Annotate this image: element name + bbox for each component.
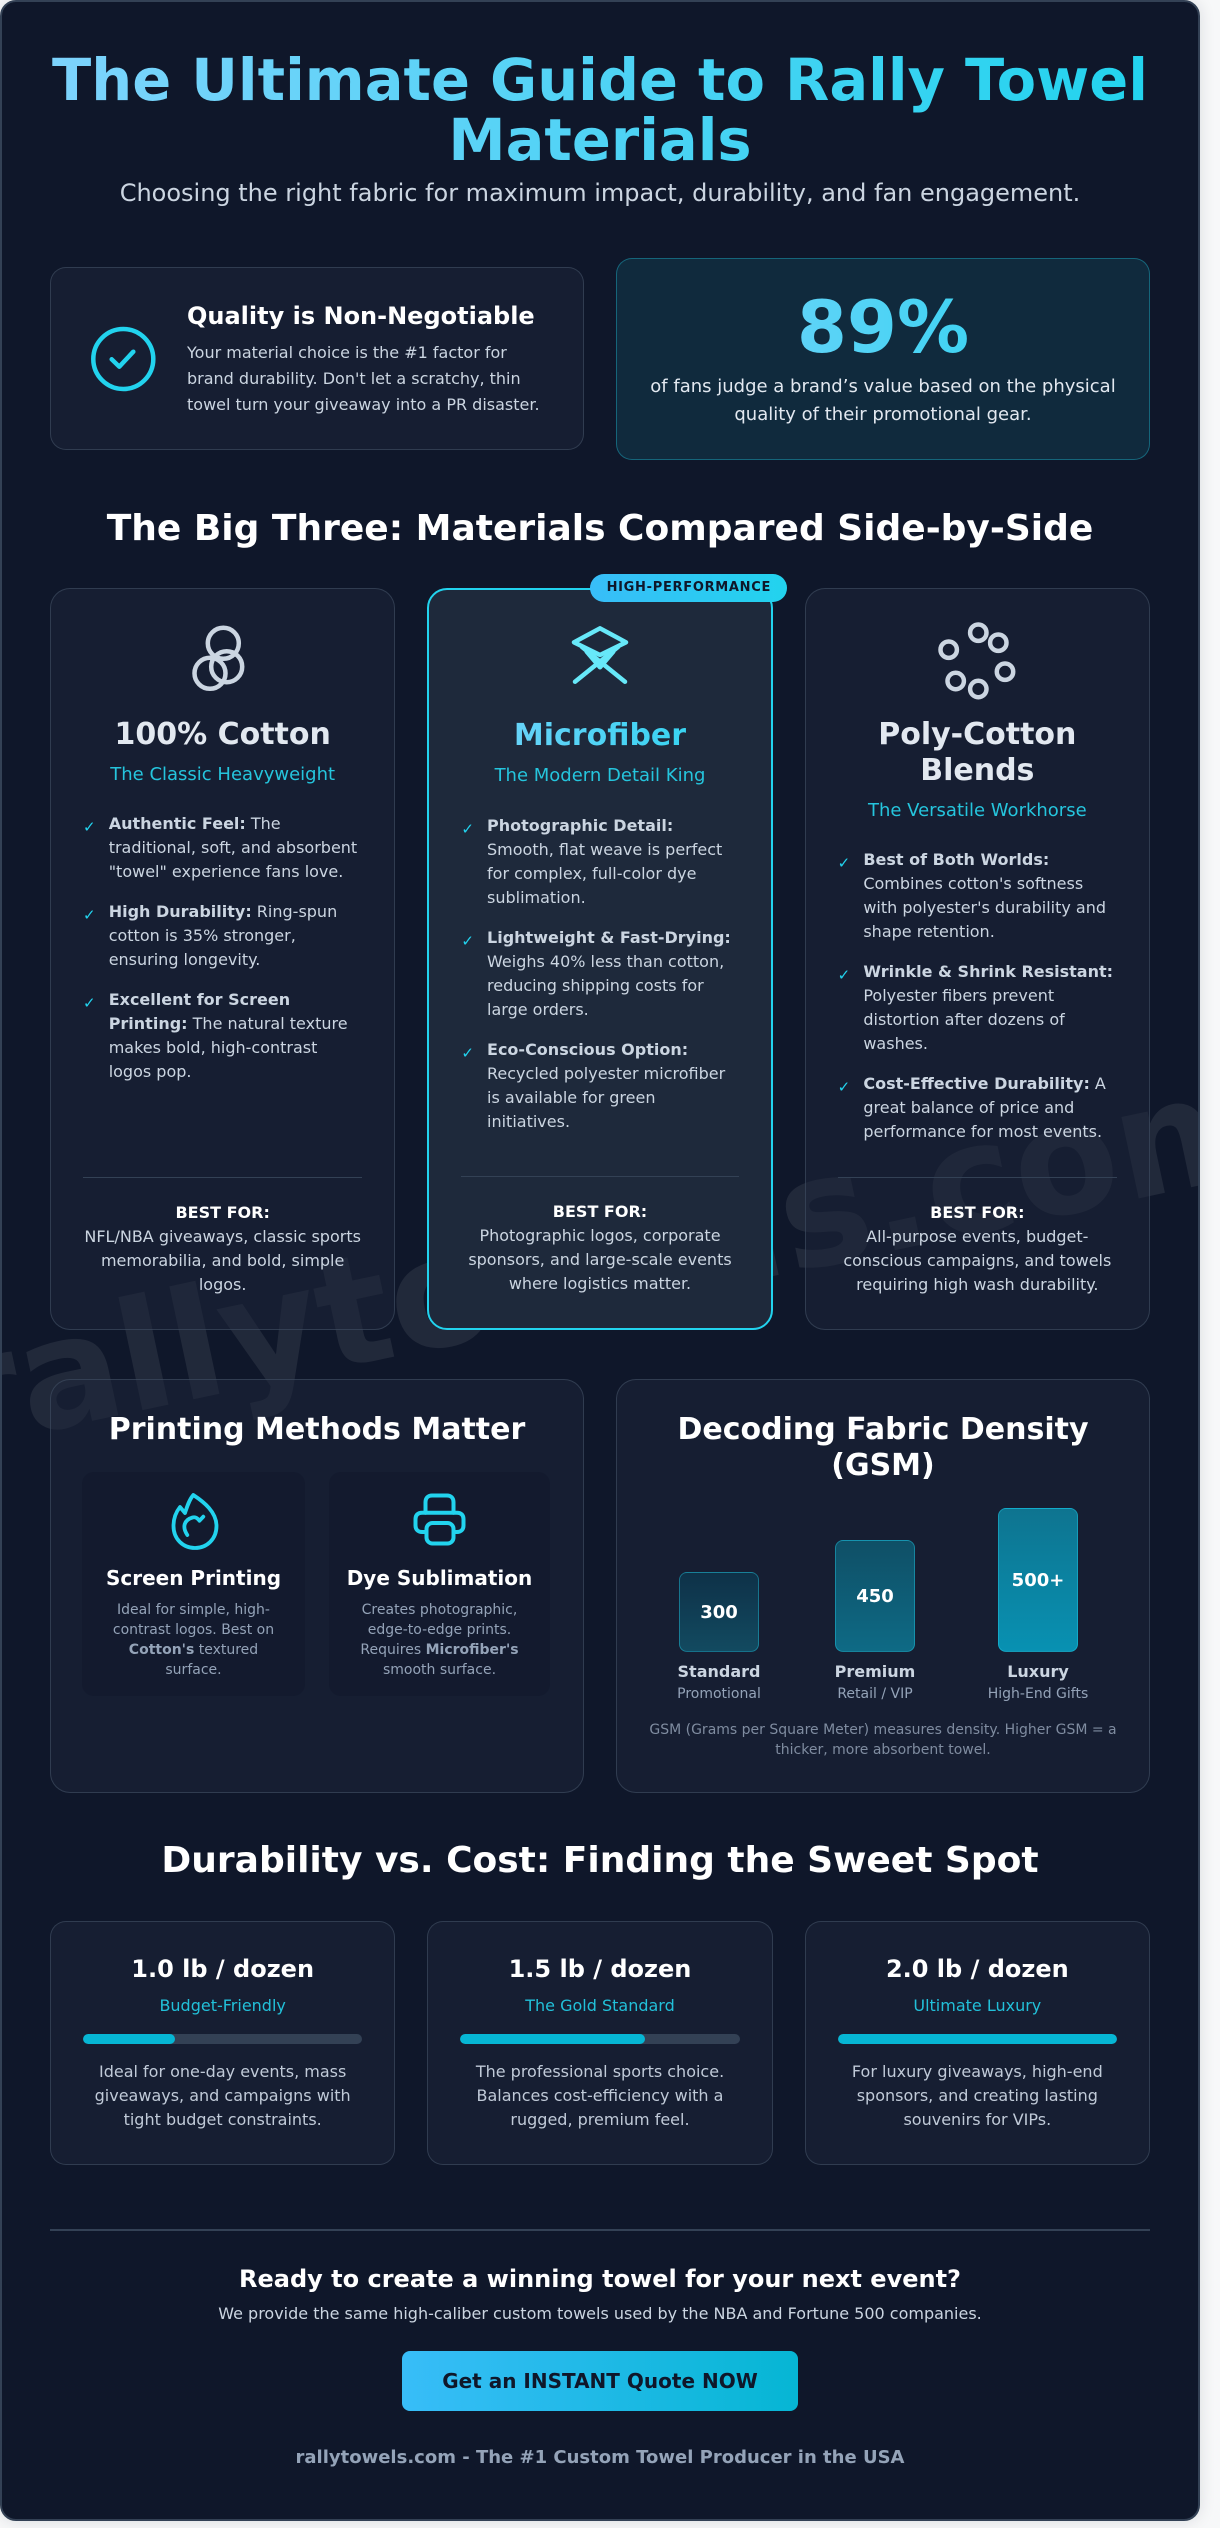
- bar chart: gsm: Retail / VIP: [837, 1686, 913, 1702]
- feature list: washes.: [863, 1034, 928, 1053]
- label: standard: Standard: [678, 1662, 760, 1681]
- feature list: ✓: [461, 1044, 474, 1062]
- feature list: sublimation.: [487, 888, 586, 907]
- feature list: distortion after dozens of: [863, 1010, 1065, 1029]
- material name: 100% Cotton: [114, 717, 331, 752]
- feature list: ✓: [83, 994, 96, 1012]
- feature list: ensuring longevity.: [109, 950, 260, 969]
- panel: microfiber: [427, 588, 773, 1330]
- stat caption: quality of their promotional gear.: [734, 404, 1032, 425]
- gsm note: GSM (Grams per Square Meter) measures density. Higher GSM = a: [649, 1722, 1117, 1738]
- body text: Your material choice is the #1 factor for: [187, 343, 507, 362]
- best for: BEST FOR:: [553, 1202, 647, 1221]
- icon: microfiber weave: [572, 626, 628, 684]
- feature list: Cost-Effective Durability: A: [863, 1074, 1106, 1093]
- feature list: is available for green: [487, 1088, 655, 1107]
- feature list: reducing shipping costs for: [487, 976, 704, 995]
- description: [852, 2062, 1103, 2129]
- method: dye sublimation: edge-to-edge prints.: [368, 1622, 511, 1638]
- feature list: Combines cotton's softness: [863, 874, 1083, 893]
- feature list: High Durability: Ring-spun: [109, 902, 337, 921]
- feature list: Smooth, flat weave is perfect: [487, 840, 722, 859]
- method: screen printing: Ideal for simple, high-: [117, 1602, 270, 1618]
- bar: 450: 450: [856, 1586, 894, 1606]
- stat caption: of fans judge a brand’s value based on the physical: [650, 376, 1116, 397]
- description: tight budget constraints.: [124, 2110, 322, 2129]
- bar: 500+: [998, 1508, 1078, 1652]
- heading: durability vs cost: Durability vs. Cost: Finding the Sweet Spot: [161, 1840, 1039, 1881]
- tier: Budget-Friendly: [159, 1996, 286, 2015]
- heading: Decoding Fabric Density: [677, 1412, 1089, 1447]
- feature list: makes bold, high-contrast: [109, 1038, 317, 1057]
- description: giveaways, and campaigns with: [95, 2086, 351, 2105]
- weight: 1.0 lb / dozen: [131, 1955, 314, 1983]
- method: screen printing: [82, 1472, 305, 1696]
- feature list: Eco-Conscious Option:: [487, 1040, 688, 1059]
- progress bar: [460, 2034, 740, 2044]
- feature list: cotton is 35% stronger,: [109, 926, 296, 945]
- footer: rallytowels.com - The #1 Custom Towel Producer in the USA: [296, 2447, 904, 2468]
- best for: conscious campaigns, and towels: [843, 1251, 1111, 1270]
- bar chart: gsm: Promotional: [677, 1686, 761, 1702]
- feature list: [83, 814, 357, 1081]
- heading: the big three: The Big Three: Materials Compared Side-by-Side: [107, 508, 1093, 549]
- bar: 500+: 500+: [1012, 1570, 1064, 1590]
- description: For luxury giveaways, high-end: [852, 2062, 1103, 2081]
- panel: quality is non-negotiable: [50, 267, 584, 450]
- bar: 300: 300: [700, 1602, 738, 1622]
- feature list: Printing: The natural texture: [109, 1014, 348, 1033]
- icon: check circle: [91, 326, 156, 392]
- panel: 1.5 lb: [427, 1921, 773, 2165]
- tier: The Gold Standard: [525, 1996, 675, 2015]
- best for: [468, 1202, 732, 1293]
- method: screen printing: Cotton's textured: [129, 1642, 258, 1658]
- material name: Poly-Cotton: [878, 717, 1076, 752]
- feature list: with polyester's durability and: [863, 898, 1106, 917]
- tier: Ultimate Luxury: [913, 1996, 1041, 2015]
- panel: 100% cotton: [50, 588, 395, 1330]
- feature list: shape retention.: [863, 922, 995, 941]
- feature list: Polyester fibers prevent: [863, 986, 1054, 1005]
- bar chart: gsm: [677, 1508, 1088, 1702]
- feature list: [461, 816, 731, 1131]
- feature list: for complex, full-color dye: [487, 864, 696, 883]
- bar: 450: [835, 1540, 915, 1652]
- bar chart: gsm: High-End Gifts: [988, 1686, 1088, 1702]
- badge: high-performance: [590, 574, 787, 602]
- feature list: logos pop.: [109, 1062, 191, 1081]
- label: premium: Premium: [835, 1662, 915, 1681]
- material name: [878, 717, 1076, 788]
- cta button: Get an INSTANT Quote NOW: [442, 2369, 758, 2393]
- panel: fabric density: [616, 1379, 1150, 1793]
- description: Balances cost-efficiency with a: [477, 2086, 723, 2105]
- best for: where logistics matter.: [509, 1274, 691, 1293]
- feature list: large orders.: [487, 1000, 589, 1019]
- feature list: ✓: [838, 854, 850, 872]
- feature list: Excellent for Screen: [109, 990, 290, 1009]
- feature list: traditional, soft, and absorbent: [109, 838, 357, 857]
- best for: BEST FOR:: [175, 1203, 270, 1222]
- progress bar: [838, 2034, 1117, 2044]
- best for: [84, 1203, 361, 1294]
- feature list: Photographic Detail:: [487, 816, 673, 835]
- feature list: [838, 850, 1113, 1141]
- method: dye sublimation: [329, 1472, 550, 1696]
- feature list: "towel" experience fans love.: [109, 862, 343, 881]
- description: sponsors, and creating lasting: [857, 2086, 1098, 2105]
- feature list: Best of Both Worlds:: [863, 850, 1049, 869]
- feature list: ✓: [83, 906, 96, 924]
- stat number: [617, 285, 1149, 369]
- method: dye sublimation: Requires Microfiber's: [360, 1642, 519, 1658]
- icon: flame: [172, 1493, 218, 1550]
- best for: sponsors, and large-scale events: [468, 1250, 732, 1269]
- body text: [187, 343, 540, 414]
- stat number: 89%: [797, 285, 969, 369]
- best for: All-purpose events, budget-: [866, 1227, 1088, 1246]
- tagline: The Classic Heavyweight: [110, 764, 335, 785]
- tagline: The Modern Detail King: [495, 765, 705, 786]
- cta heading: Ready to create a winning towel for your next event?: [239, 2265, 961, 2293]
- feature list: great balance of price and: [863, 1098, 1074, 1117]
- method: dye sublimation: smooth surface.: [383, 1662, 496, 1678]
- icon: blended fibers: [938, 622, 1016, 700]
- badge: high-performance: HIGH-PERFORMANCE: [607, 580, 771, 595]
- title: The Ultimate Guide to Rally Towel: [52, 47, 1148, 114]
- best for: requiring high wash durability.: [856, 1275, 1098, 1294]
- method: dye sublimation: Dye Sublimation: [347, 1566, 532, 1590]
- panel: 1.0 lb: [50, 1921, 395, 2165]
- body text: brand durability. Don't let a scratchy, thin: [187, 369, 521, 388]
- feature list: ✓: [461, 820, 474, 838]
- bar: 300: [679, 1572, 759, 1652]
- best for: NFL/NBA giveaways, classic sports: [84, 1227, 361, 1246]
- weight: 1.5 lb / dozen: [509, 1955, 691, 1983]
- best for: Photographic logos, corporate: [479, 1226, 721, 1245]
- description: rugged, premium feel.: [510, 2110, 690, 2129]
- body text: towel turn your giveaway into a PR disaster.: [187, 395, 540, 414]
- method: screen printing: contrast logos. Best on: [113, 1622, 274, 1638]
- tagline: The Versatile Workhorse: [868, 800, 1087, 821]
- description: Ideal for one-day events, mass: [99, 2062, 346, 2081]
- description: souvenirs for VIPs.: [903, 2110, 1051, 2129]
- feature list: Lightweight & Fast-Drying:: [487, 928, 731, 947]
- description: [476, 2062, 724, 2129]
- icon: printer: [414, 1494, 466, 1546]
- best for: BEST FOR:: [930, 1203, 1025, 1222]
- gsm note: [649, 1722, 1117, 1758]
- heading: (GSM): [831, 1448, 935, 1483]
- feature list: Wrinkle & Shrink Resistant:: [863, 962, 1113, 981]
- gsm note: thicker, more absorbent towel.: [775, 1742, 991, 1758]
- title: Materials: [448, 107, 752, 174]
- feature list: Recycled polyester microfiber: [487, 1064, 725, 1083]
- panel: printing methods: [50, 1379, 584, 1793]
- description: The professional sports choice.: [476, 2062, 724, 2081]
- cta button: [402, 2351, 798, 2411]
- cta text: We provide the same high-caliber custom towels used by the NBA and Fortune 500 companies.: [218, 2304, 982, 2323]
- feature list: Authentic Feel: The: [109, 814, 281, 833]
- feature list: ✓: [83, 818, 96, 836]
- material name: Microfiber: [514, 718, 686, 753]
- material name: Blends: [920, 753, 1034, 788]
- heading: Quality is Non-Negotiable: [187, 302, 535, 330]
- best for: logos.: [199, 1275, 246, 1294]
- method: screen printing: surface.: [165, 1662, 222, 1678]
- stat caption: [650, 376, 1116, 425]
- method: dye sublimation: Creates photographic,: [362, 1602, 517, 1618]
- title: [50, 51, 1150, 171]
- progress bar: [83, 2034, 362, 2044]
- method: screen printing: Screen Printing: [106, 1566, 281, 1590]
- subtitle: Choosing the right fabric for maximum impact, durability, and fan engagement.: [120, 179, 1080, 207]
- feature list: Weighs 40% less than cotton,: [487, 952, 724, 971]
- feature list: initiatives.: [487, 1112, 570, 1131]
- feature list: ✓: [838, 1078, 850, 1096]
- icon: cotton rings: [192, 626, 244, 691]
- feature list: ✓: [461, 932, 474, 950]
- panel: 2.0 lb: [805, 1921, 1150, 2165]
- feature list: ✓: [838, 966, 850, 984]
- material name: [429, 718, 771, 754]
- best for: [843, 1203, 1111, 1294]
- heading: [677, 1412, 1089, 1483]
- best for: memorabilia, and bold, simple: [101, 1251, 344, 1270]
- panel: poly-cotton blends: [805, 588, 1150, 1330]
- feature list: performance for most events.: [863, 1122, 1102, 1141]
- description: [95, 2062, 351, 2129]
- weight: 2.0 lb / dozen: [886, 1955, 1069, 1983]
- label: luxury: Luxury: [1007, 1662, 1069, 1681]
- panel: 89% statistic: [616, 258, 1150, 460]
- heading: Printing Methods Matter: [109, 1412, 525, 1447]
